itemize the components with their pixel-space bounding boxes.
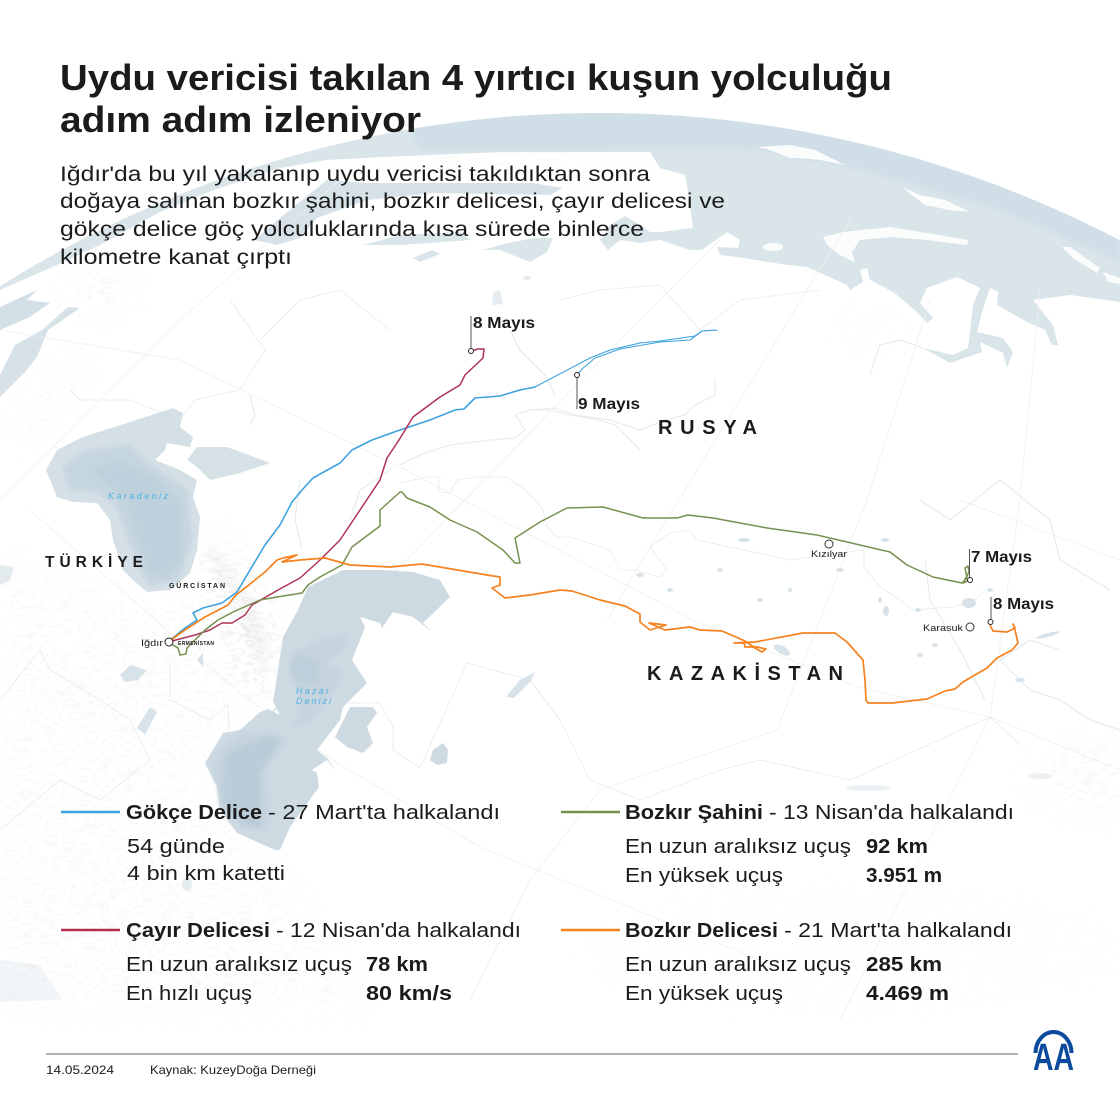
black sea <box>46 408 270 592</box>
intro text: Iğdır'da bu yıl yakalanıp uydu vericisi takıldıktan sonra <box>60 163 650 186</box>
legend: Çayır Delicesi: 78 km <box>366 954 428 976</box>
legend: Bozkır Delicesi: - 21 Mart'ta halkalandı <box>784 920 1012 942</box>
country label: Kazakistan: KAZAKİSTAN <box>647 662 843 685</box>
country label: Ermenistan: ERMENİSTAN <box>178 640 214 647</box>
sea label: Hazar Denizi: Hazar <box>296 686 330 696</box>
intro text: doğaya salınan bozkır şahini, bozkır delicesi, çayır delicesi ve <box>60 190 725 213</box>
legend: Gökçe Delice: Gökçe Delice <box>126 802 262 824</box>
legend: Bozkır Şahini: 92 km <box>866 836 928 858</box>
legend: Gökçe Delice: 4 bin km katetti <box>127 863 285 885</box>
end marker: 8 Mayıs (Bozkır Delicesi) <box>988 596 1054 624</box>
mountain shading <box>205 548 270 680</box>
legend: Çayır Delicesi <box>61 920 521 1005</box>
city: Karasuk: Karasuk <box>923 623 963 634</box>
legend: Bozkır Delicesi: En yüksek uçuş <box>625 983 783 1005</box>
legend: Bozkır Şahini: Bozkır Şahini <box>625 802 763 824</box>
intro text: gökçe delice göç yolculuklarında kısa sürede binlerce <box>60 218 644 241</box>
end marker: 7 Mayıs (Bozkır Şahini) <box>968 549 1032 582</box>
legend: Çayır Delicesi: - 12 Nisan'da halkalandı <box>276 920 521 942</box>
city: Iğdır: Iğdır <box>141 638 163 649</box>
legend: Çayır Delicesi: En hızlı uçuş <box>126 983 252 1005</box>
sea label: Hazar Denizi <box>296 686 332 706</box>
legend: Gökçe Delice: 54 günde <box>127 836 225 858</box>
kara-bogaz <box>335 707 377 753</box>
legend: Bozkır Delicesi: En uzun aralıksız uçuş <box>625 954 851 976</box>
aral <box>430 743 448 765</box>
legend: Gökçe Delice: - 27 Mart'ta halkalandı <box>268 802 500 824</box>
legend: Bozkır Şahini: En yüksek uçuş <box>625 865 783 887</box>
intro text: kilometre kanat çırptı <box>60 246 292 269</box>
country label: Türkiye: TÜRKİYE <box>45 554 143 571</box>
end marker: 8 Mayıs (Çayır Delicesi) <box>468 315 535 354</box>
rivers <box>250 330 1120 730</box>
legend: Çayır Delicesi: Çayır Delicesi <box>126 920 270 942</box>
route: Bozkır Delicesi (orange) <box>168 555 1018 703</box>
country label: Rusya: RUSYA <box>658 417 757 439</box>
baltic and northern waters <box>0 180 563 1002</box>
legend: Bozkır Delicesi: 285 km <box>866 954 942 976</box>
arctic limb band <box>400 110 1120 262</box>
route: Gökçe Delice (blue) <box>168 330 717 642</box>
country label: Gürcistan: GÜRCİSTAN <box>169 581 225 590</box>
route: Bozkır Şahini (green) <box>168 492 970 655</box>
legend: Bozkır Delicesi: Bozkır Delicesi <box>625 920 778 942</box>
city: Iğdır <box>141 638 173 649</box>
end marker: 7 Mayıs (Bozkır Şahini): 7 Mayıs <box>971 549 1032 566</box>
caspian sea <box>205 570 450 850</box>
graticule <box>0 180 1120 1020</box>
legend: Çayır Delicesi: 80 km/s <box>366 983 452 1005</box>
title: Uydu vericisi takılan 4 yırtıcı kuşun yolculuğu <box>60 57 892 98</box>
city: Karasuk <box>923 623 974 634</box>
city: Kızılyar: Kızılyar <box>811 549 847 560</box>
footer: date and source <box>46 1054 1018 1077</box>
arctic islands <box>757 145 1120 284</box>
footer: date and source: Kaynak: KuzeyDoğa Derneği <box>150 1063 316 1077</box>
end marker: 8 Mayıs (Çayır Delicesi): 8 Mayıs <box>473 315 535 332</box>
legend: Bozkır Delicesi <box>561 920 1012 1005</box>
legend: Bozkır Şahini: 3.951 m <box>866 865 942 887</box>
title <box>60 57 892 140</box>
end marker: 8 Mayıs (Bozkır Delicesi): 8 Mayıs <box>993 596 1054 613</box>
icon: Anadolu Agency logo: AA <box>1033 1037 1074 1079</box>
end marker: 9 Mayıs (Gökçe Delice) <box>574 372 640 413</box>
borders <box>0 285 1020 830</box>
legend: Bozkır Şahini: En uzun aralıksız uçuş <box>625 836 851 858</box>
intro text <box>60 163 725 269</box>
route: Çayır Delicesi (red) <box>168 349 484 642</box>
other lakes <box>120 538 1060 891</box>
terrain relief <box>98 288 280 690</box>
legend: Gökçe Delice <box>61 802 500 885</box>
legend: Bozkır Delicesi: 4.469 m <box>866 983 949 1005</box>
end marker: 9 Mayıs (Gökçe Delice): 9 Mayıs <box>578 396 640 413</box>
sea of azov <box>187 447 270 480</box>
icon: Anadolu Agency logo <box>1033 1032 1074 1079</box>
footer: date and source: 14.05.2024 <box>46 1063 114 1077</box>
arctic ocean <box>0 113 1120 368</box>
legend: Bozkır Şahini: - 13 Nisan'da halkalandı <box>769 802 1014 824</box>
city: Kızılyar <box>811 540 847 560</box>
legend: Çayır Delicesi: En uzun aralıksız uçuş <box>126 954 352 976</box>
title: adım adım izleniyor <box>60 99 421 140</box>
legend: Bozkır Şahini <box>561 802 1014 887</box>
sea label: Hazar Denizi: Denizi <box>296 696 332 706</box>
sea label: Karadeniz: Karadeniz <box>108 491 168 501</box>
